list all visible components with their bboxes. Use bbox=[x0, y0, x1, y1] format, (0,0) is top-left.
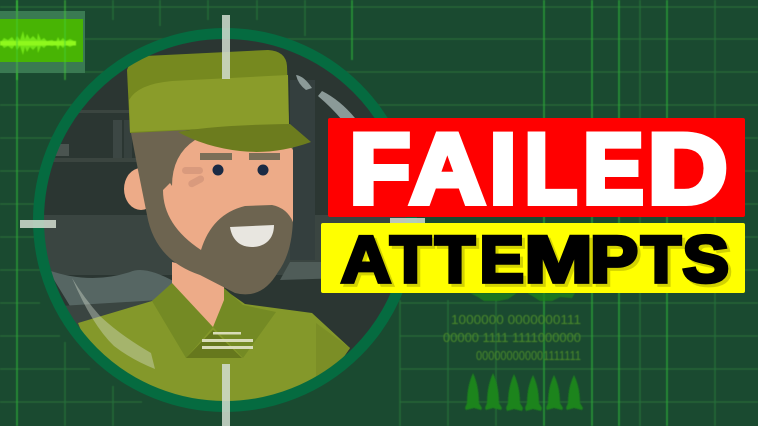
title: FAILED: D bbox=[648, 113, 728, 224]
title: FAILED: I bbox=[490, 113, 516, 224]
scope ring bbox=[38, 34, 412, 406]
title: ATTEMPTS: S bbox=[682, 223, 729, 296]
title: FAILED bbox=[328, 113, 745, 224]
scope lens with soldier bbox=[30, 25, 430, 425]
waveform panel bbox=[0, 0, 85, 80]
hair and beard bbox=[130, 128, 293, 294]
title: FAILED: L bbox=[524, 113, 577, 224]
rocket icons bbox=[465, 293, 583, 411]
binary code text: 1000000 0000000111 bbox=[451, 312, 581, 327]
smile bbox=[230, 225, 274, 247]
shirt bbox=[78, 286, 350, 401]
binary code text: 000000000001111111 bbox=[476, 348, 581, 363]
title: FAILED: A bbox=[410, 113, 485, 224]
title: ATTEMPTS: A bbox=[341, 223, 391, 296]
tie knot bbox=[186, 330, 242, 358]
neck bbox=[172, 262, 224, 327]
ear bbox=[124, 168, 146, 210]
eyes bbox=[212, 164, 224, 176]
title: ATTEMPTS: M bbox=[524, 223, 592, 296]
scope background room bbox=[44, 39, 406, 356]
binary code text bbox=[443, 312, 581, 363]
title: ATTEMPTS: T bbox=[390, 223, 431, 296]
title: ATTEMPTS bbox=[321, 223, 745, 296]
lens glare bbox=[72, 278, 155, 369]
cap crown bbox=[127, 50, 289, 133]
binary code text: 00000 1111 1111000000 bbox=[443, 330, 581, 345]
scar marks bbox=[182, 167, 203, 174]
soldier figure bbox=[78, 50, 350, 420]
title: FAILED: F bbox=[350, 113, 410, 224]
face bbox=[163, 140, 293, 250]
title: ATTEMPTS: E bbox=[480, 223, 524, 296]
cap visor bbox=[178, 124, 311, 152]
title: ATTEMPTS: T bbox=[435, 223, 475, 296]
title: FAILED: E bbox=[583, 113, 644, 224]
title: ATTEMPTS: T bbox=[641, 223, 681, 296]
collar bbox=[152, 283, 213, 358]
title: ATTEMPTS: P bbox=[590, 223, 638, 296]
rank stripes bbox=[202, 332, 253, 349]
eyebrows bbox=[200, 153, 232, 160]
crosshair ticks bbox=[20, 15, 425, 426]
